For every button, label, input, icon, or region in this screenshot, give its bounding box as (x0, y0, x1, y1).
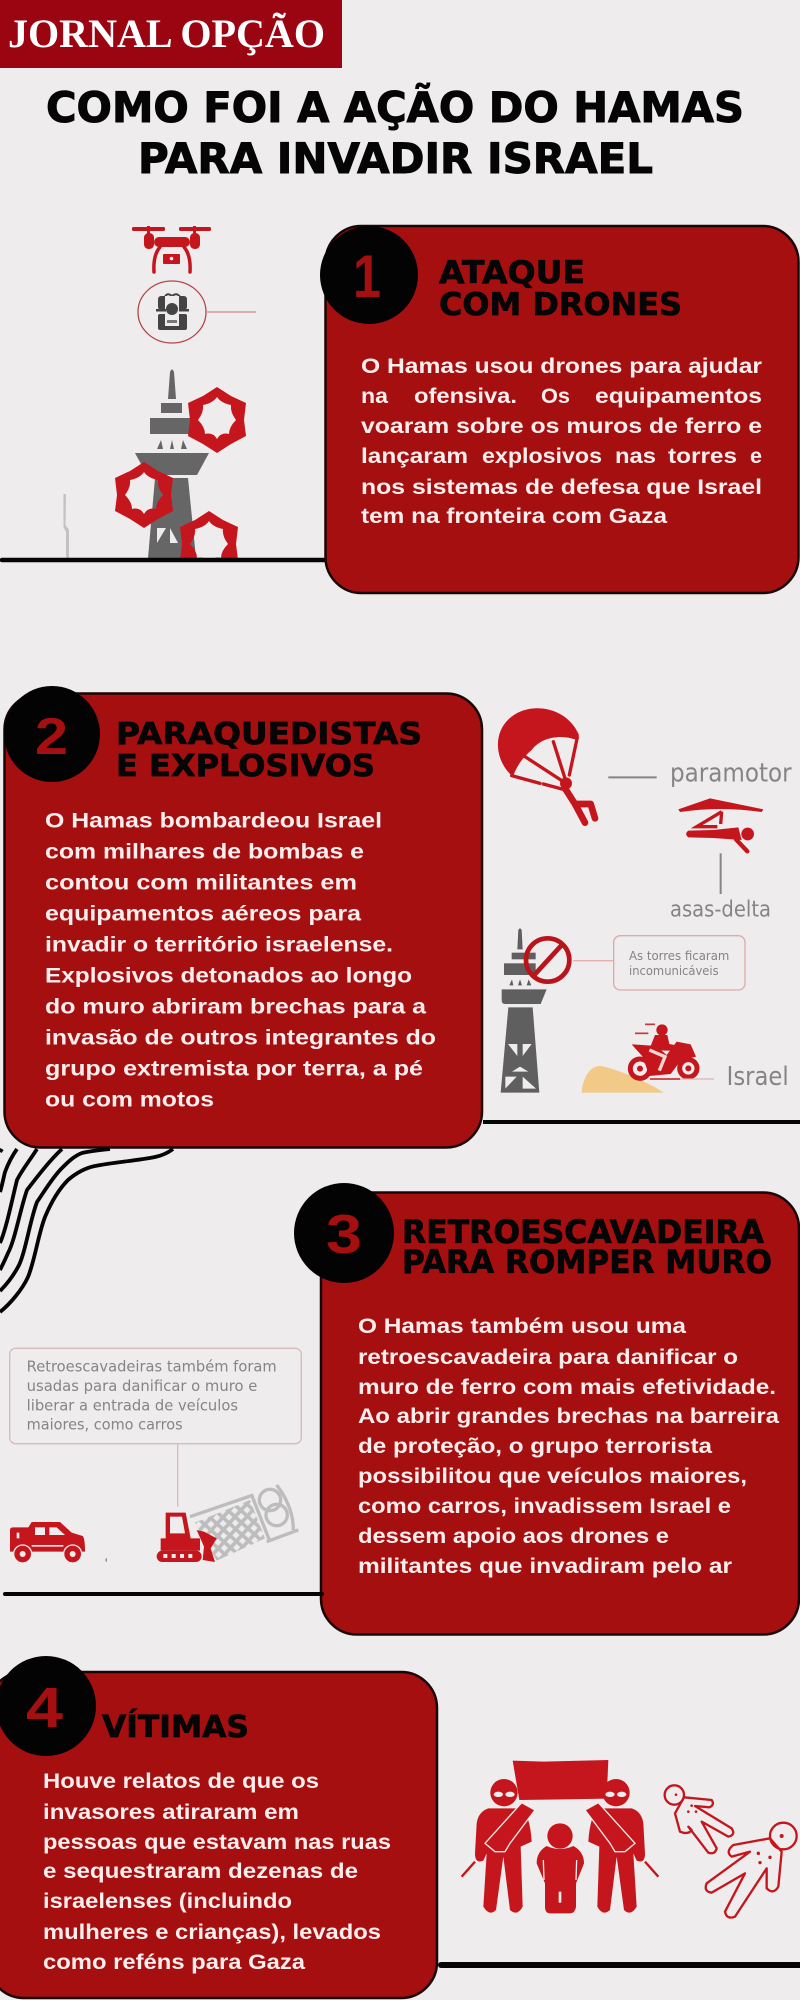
body text 2 (45, 809, 436, 1112)
body text 3: retroescavadeira para danificar o (358, 1345, 738, 1369)
body text 2: com milhares de bombas e (45, 840, 364, 864)
icon: sand dune (582, 1066, 664, 1093)
body text 4: mulheres e crianças), levados (43, 1920, 381, 1944)
body text 1: Os (541, 384, 570, 408)
body text 1: tem na fronteira com Gaza (361, 504, 668, 528)
number badge 1: 1 (353, 243, 381, 310)
body text 1: na (361, 384, 389, 408)
body text 1 (361, 354, 763, 528)
body text 2: Explosivos detonados ao longo (45, 964, 412, 988)
callout: torres incomunicáveis: incomunicáveis (629, 963, 719, 978)
body text 3: de proteção, o grupo terrorista (358, 1434, 713, 1458)
panel 3: retroescavadeira (294, 1183, 799, 1634)
number badge 1 (320, 226, 418, 324)
body text 2: grupo extremista por terra, a pé (45, 1057, 423, 1081)
heading 3 (402, 1213, 772, 1281)
illustration: hostages and victims (462, 1760, 797, 1918)
number badge 3: 3 (326, 1203, 362, 1265)
body text 2: invasão de outros integrantes do (45, 1026, 436, 1050)
label: Israel: Israel (727, 1061, 789, 1091)
number badge 4 (0, 1656, 96, 1756)
heading 2 (116, 717, 422, 784)
callout: retroescavadeiras (10, 1348, 301, 1507)
body text 2: ou com motos (45, 1088, 214, 1112)
header: Jornal Opção: JORNAL OPÇÃO (8, 11, 325, 56)
body text 4: israelenses (incluindo (43, 1889, 292, 1913)
body text 2: do muro abriram brechas para a (45, 995, 427, 1019)
icon: wire fence (190, 1485, 298, 1561)
body text 1: torres (668, 444, 737, 468)
heading 3: PARA ROMPER MURO (402, 1243, 772, 1281)
icon: hang glider (678, 798, 763, 851)
callout: torres incomunicáveis: As torres ficaram (629, 948, 729, 963)
body text 3 (358, 1314, 780, 1578)
label: asas-delta: asas-delta (670, 898, 771, 923)
heading 2: PARAQUEDISTAS (116, 717, 422, 752)
illustration: excavator and car (10, 1348, 301, 1563)
body text 3: dessem apoio aos drones e (358, 1524, 669, 1548)
icon: tower (135, 370, 209, 558)
callout: retroescavadeiras: liberar a entrada de veículos (27, 1396, 238, 1414)
body text 4: e sequestraram dezenas de (43, 1859, 358, 1883)
title: PARA INVADIR ISRAEL (138, 134, 653, 183)
icon: bulldozer (157, 1513, 217, 1562)
number badge 2: 2 (35, 708, 68, 766)
icon: car (10, 1522, 85, 1563)
panel 2: paraquedistas e explosivos (4, 686, 482, 1148)
callout: retroescavadeiras: maiores, como carros (27, 1416, 183, 1434)
number badge 3 (294, 1183, 394, 1283)
title (46, 82, 744, 183)
body text 1: ofensiva. (414, 384, 517, 408)
speck (105, 1558, 108, 1562)
panel 4: vítimas (0, 1656, 437, 1998)
panel 1: ataque com drones (320, 226, 798, 593)
body text 3: Ao abrir grandes brechas na barreira (358, 1404, 780, 1428)
heading 4: VÍTIMAS (102, 1709, 249, 1745)
body text 2: O Hamas bombardeou Israel (45, 809, 382, 833)
body text 2: equipamentos aéreos para (45, 902, 362, 926)
heading 1: ATAQUE (439, 255, 585, 291)
body text 2: invadir o território israelense. (45, 933, 393, 957)
body text 3: como carros, invadissem Israel e (358, 1494, 731, 1518)
body text 1: nos sistemas de defesa que Israel (361, 475, 762, 499)
callout: torres incomunicáveis (573, 936, 745, 990)
title: COMO FOI A AÇÃO DO HAMAS (46, 82, 744, 132)
number badge 2 (4, 686, 100, 782)
number badge 4: 4 (26, 1676, 63, 1740)
icon: left terrorist (462, 1779, 535, 1913)
decoration: wavy lines (0, 1149, 173, 1312)
body text 1: lançaram (361, 444, 468, 468)
body text 3: O Hamas também usou uma (358, 1314, 687, 1338)
heading 3: RETROESCAVADEIRA (402, 1213, 764, 1251)
body text 3: militantes que invadiram pelo ar (358, 1554, 733, 1578)
body text 4: Houve relatos de que os (43, 1769, 319, 1793)
callout: retroescavadeiras: Retroescavadeiras também foram (27, 1358, 277, 1376)
icon: bomb in circle (138, 281, 256, 343)
icon: tower with prohibition sign (501, 928, 569, 1093)
ground line 1 (2, 558, 331, 562)
body text 3: muro de ferro com mais efetividade. (358, 1375, 776, 1399)
icon: explosion left (115, 462, 173, 528)
body text 4: invasores atiraram em (43, 1800, 299, 1824)
body text 4 (43, 1769, 391, 1974)
icon: victim 2 (706, 1823, 797, 1918)
icon: right terrorist (585, 1779, 658, 1913)
icon: drone (132, 226, 211, 272)
callout: retroescavadeiras: usadas para danificar o muro e (27, 1377, 257, 1395)
ground line 3 (5, 1592, 322, 1596)
body text 2: contou com militantes em (45, 871, 357, 895)
body text 1: O Hamas usou drones para ajudar (361, 354, 763, 378)
icon: explosion bottom (180, 511, 238, 558)
header: Jornal Opção (0, 0, 342, 68)
ground line 2 (483, 1120, 800, 1124)
body text 4: pessoas que estavam nas ruas (43, 1830, 391, 1854)
body text 4: como reféns para Gaza (43, 1950, 306, 1974)
body text 1: nas (615, 444, 656, 468)
body text 1: explosivos (482, 444, 602, 468)
icon: victim 1 (665, 1785, 733, 1853)
label: asas-delta (670, 853, 771, 923)
icon: paraglider (498, 708, 595, 823)
heading 1 (439, 255, 682, 323)
icon: motorcycle rider (630, 1024, 714, 1079)
body text 1: equipamentos (595, 384, 762, 408)
body text 1: voaram sobre os muros de ferro e (361, 414, 762, 438)
heading 1: COM DRONES (439, 287, 682, 323)
heading 2: E EXPLOSIVOS (116, 749, 375, 784)
icon: fence post (64, 494, 69, 558)
ground line 4 (441, 1962, 800, 1968)
illustration: aerial invaders, tower and motorcycle (498, 708, 792, 1093)
body text 1: e (750, 444, 762, 468)
icon: hostage (537, 1823, 584, 1913)
illustration: drone over tower (64, 226, 256, 577)
icon: banner (513, 1760, 608, 1800)
body text 3: possibilitou que veículos maiores, (358, 1464, 747, 1488)
icon: explosion top right (188, 387, 246, 453)
